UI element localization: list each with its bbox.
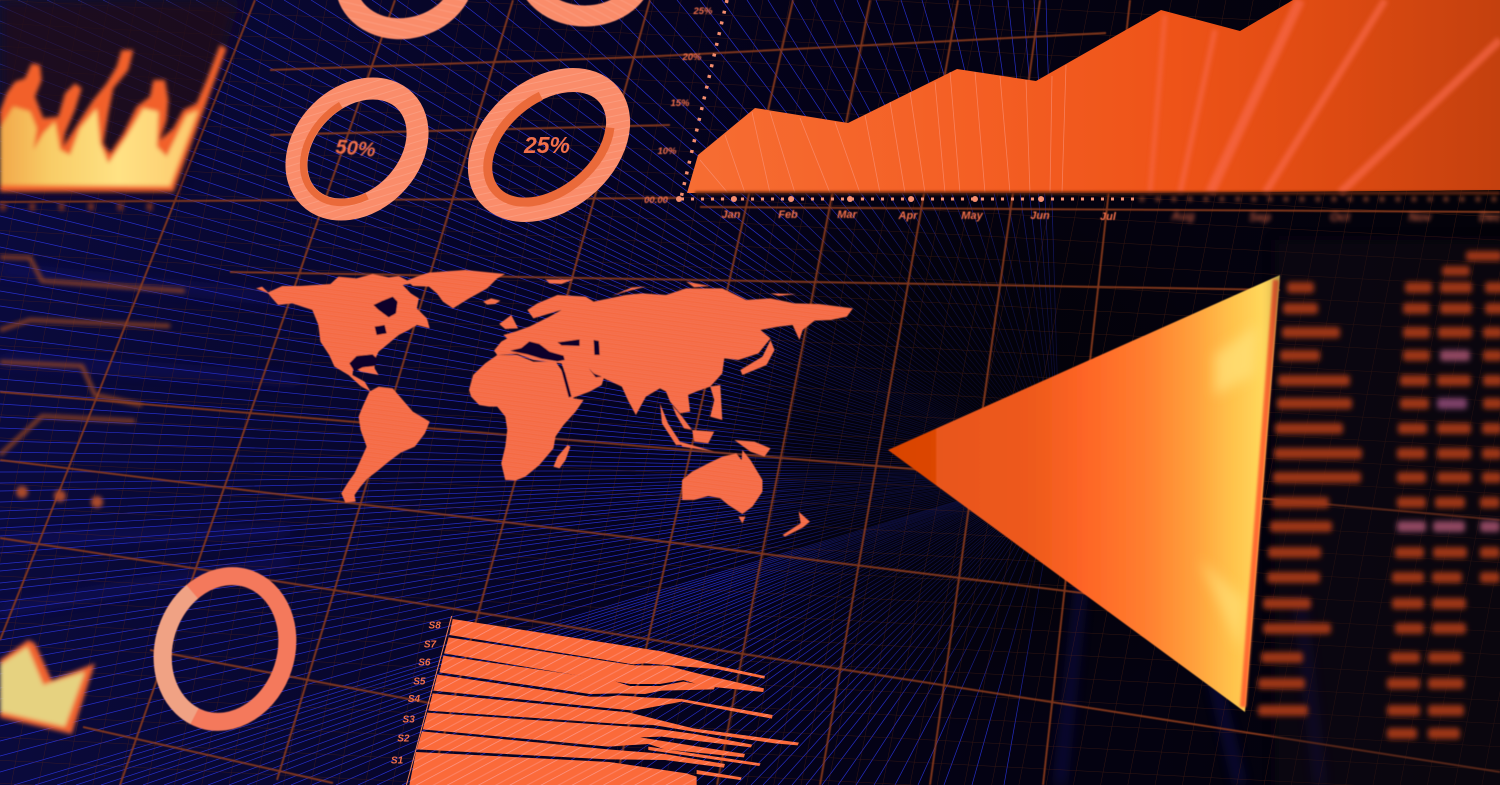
blue light rays: [0, 0, 1060, 785]
line area chart: 15%: [670, 98, 690, 109]
donut 25%: [455, 53, 643, 237]
darkened core behind funnel: [680, 130, 1290, 730]
donut bottom-left: [144, 560, 306, 738]
line area chart: Oct: [1330, 210, 1351, 224]
funnel triangle: [888, 275, 1280, 712]
line area chart: Aug: [1170, 209, 1195, 223]
line area chart: Jan: [722, 209, 741, 221]
chart: flame area top left: [0, 45, 227, 207]
line area chart: Jul: [1100, 211, 1117, 223]
line area chart: Apr: [898, 210, 918, 222]
line area chart: Mar: [837, 209, 857, 221]
bar chart: S7: [424, 640, 437, 651]
line area chart: Feb: [778, 209, 798, 221]
chart: small area bottom-left: [0, 640, 95, 734]
line area chart: Jun: [1030, 210, 1050, 222]
dark panel behind flame chart: [0, 0, 240, 194]
soft navy streaks at the edges: [0, 270, 1320, 785]
top partial rings: [334, 0, 644, 42]
bar chart: S1: [391, 755, 404, 766]
line area chart: [644, 0, 1500, 224]
line area chart: 00.00: [644, 195, 669, 206]
line area chart: 25%: [692, 6, 713, 17]
circuit lines left: [0, 257, 185, 508]
bar chart: [391, 616, 799, 785]
world map: [256, 270, 853, 537]
donut 50%: 50%: [335, 136, 377, 162]
line area chart: Nov: [1409, 210, 1433, 224]
donut 50%: [272, 64, 442, 234]
bar chart: S8: [429, 620, 441, 631]
line area chart: May: [961, 210, 984, 222]
line area chart: Sep: [1249, 210, 1271, 224]
bar chart: S3: [403, 714, 415, 725]
bar chart: S2: [397, 734, 410, 745]
donut 25%: 25%: [523, 132, 570, 158]
bar chart: S6: [418, 657, 431, 668]
line area chart: 10%: [657, 146, 677, 157]
bar chart: S5: [413, 676, 426, 687]
blurred data table: [1258, 240, 1500, 785]
line area chart: 20%: [681, 52, 702, 63]
bar chart: S4: [408, 694, 421, 705]
